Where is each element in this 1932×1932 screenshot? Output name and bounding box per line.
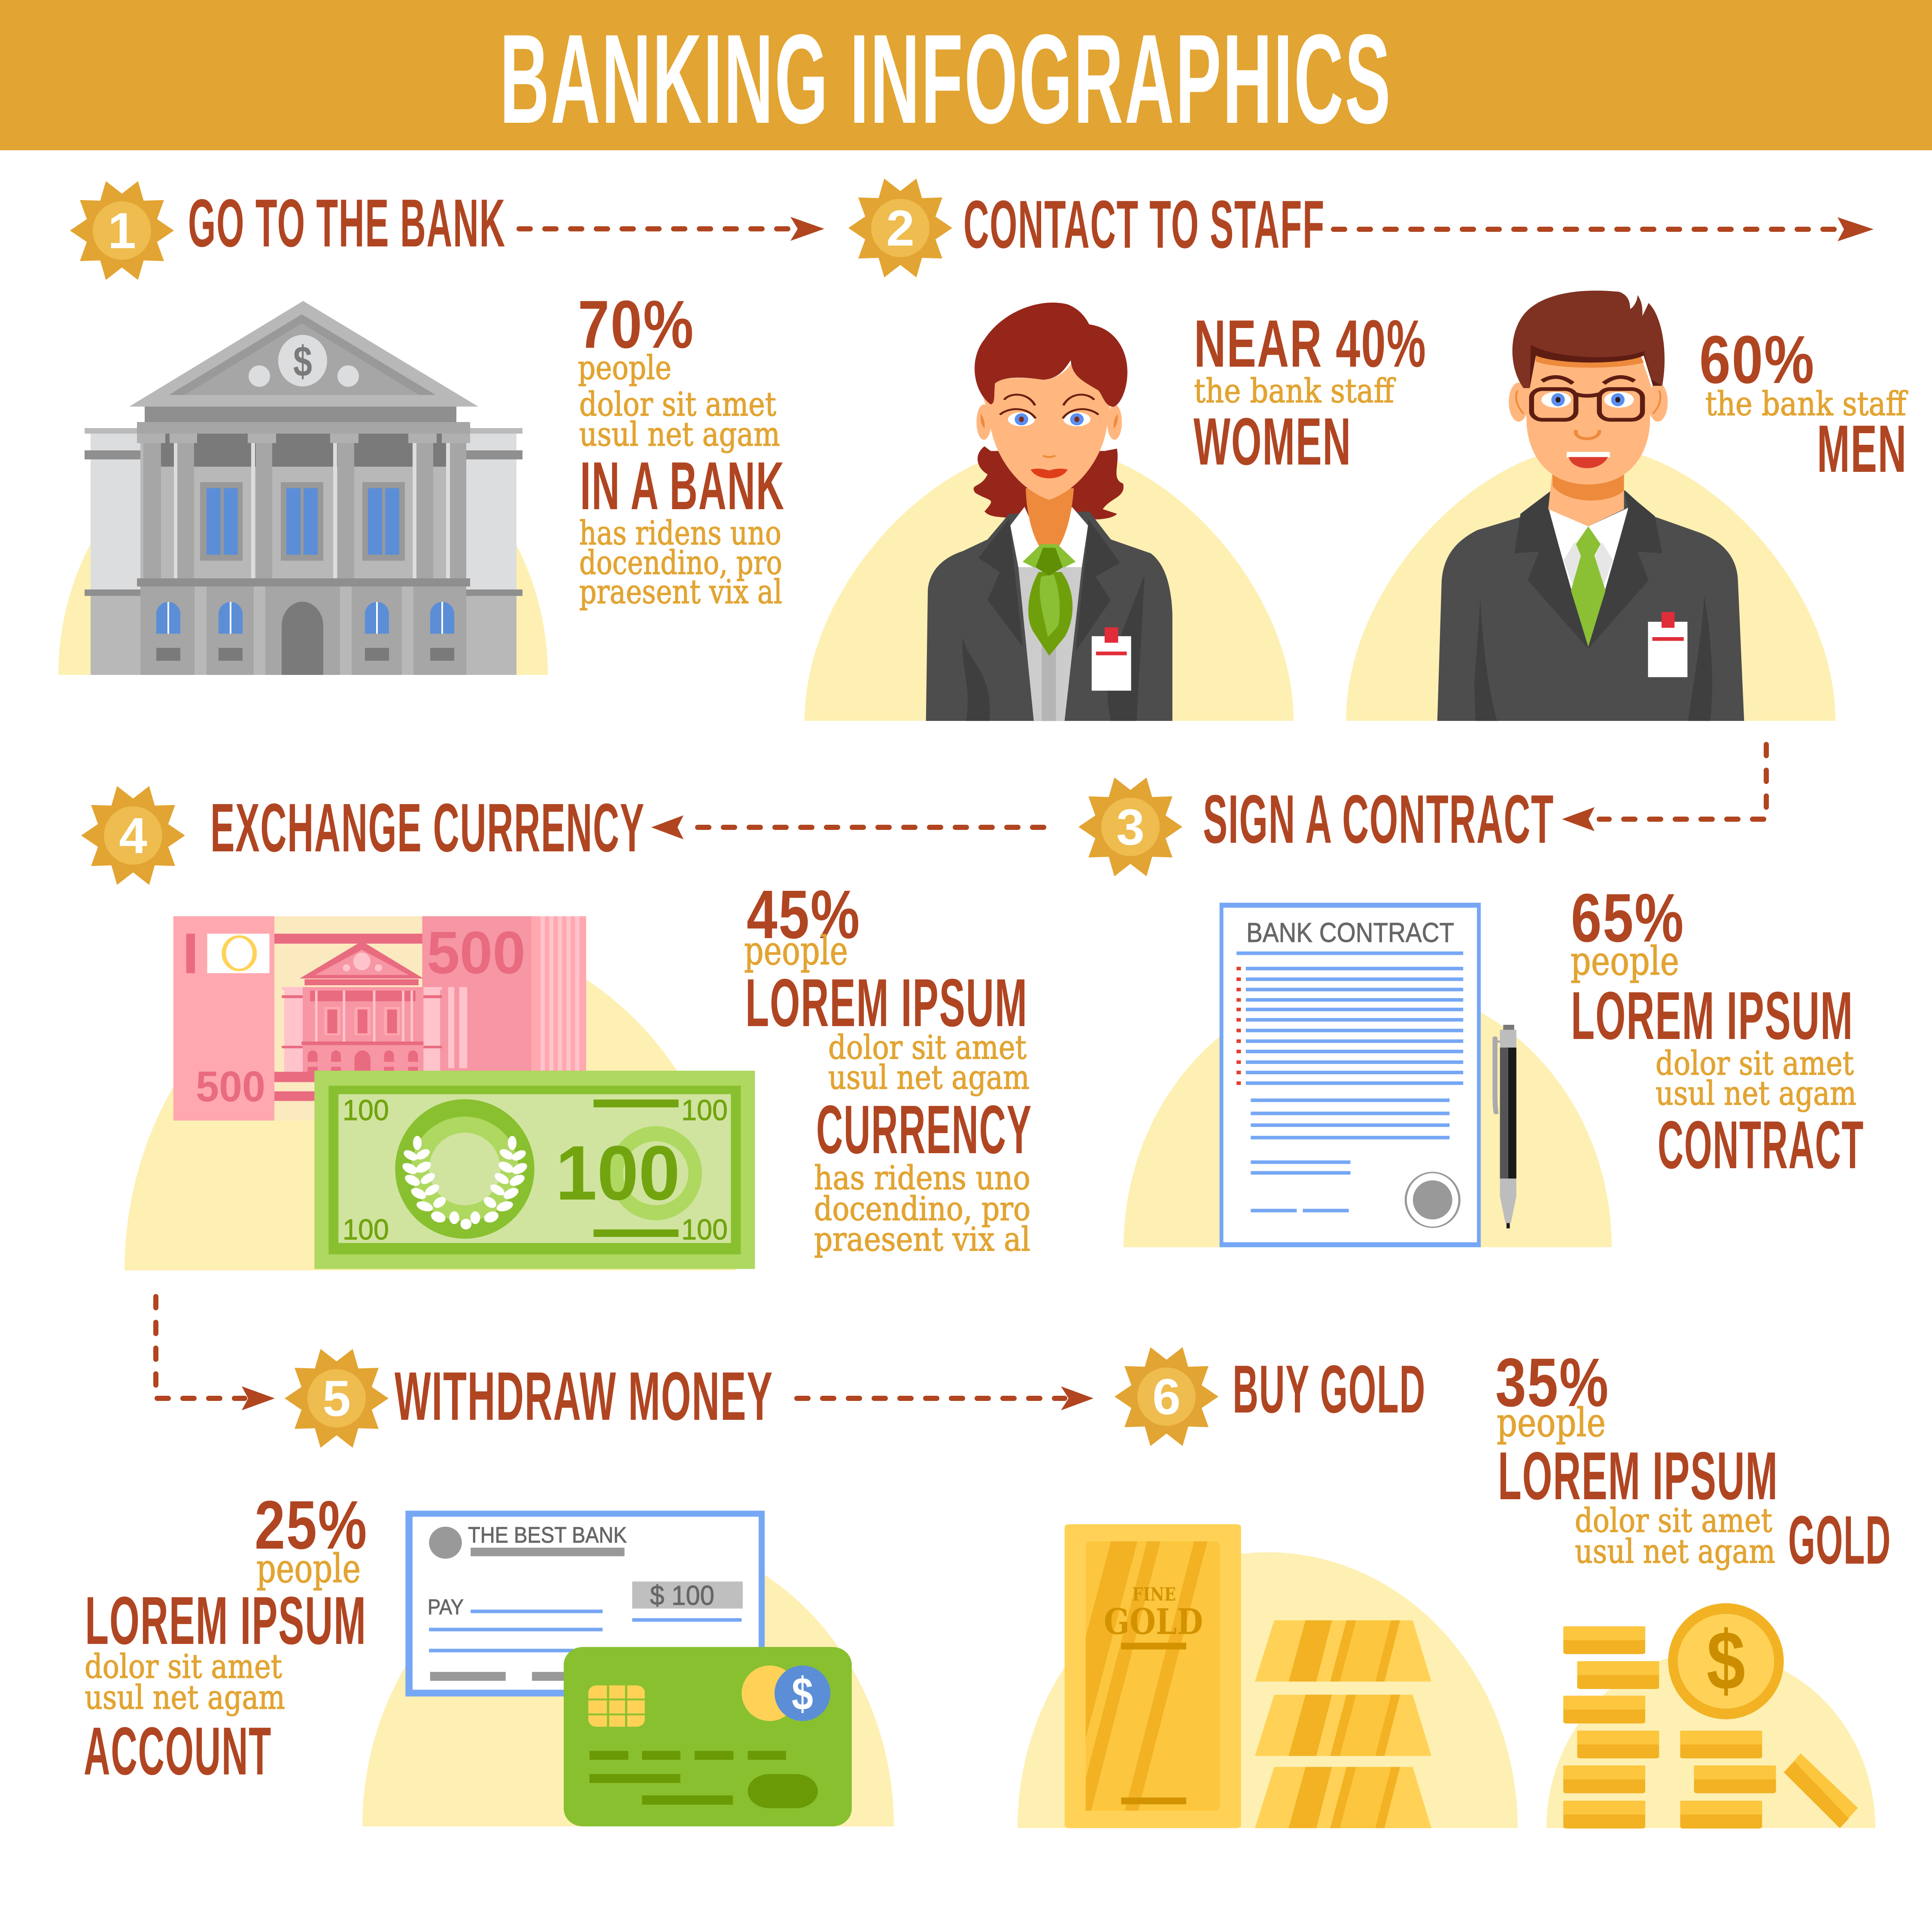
panel: step 1 go to the bank — [58, 181, 824, 675]
illustration: gold ingot — [1065, 1524, 1241, 1828]
text block: near 40% women: the bank staff — [1194, 372, 1396, 410]
illustration: contract and pen — [1220, 903, 1516, 1247]
semicircle backdrop — [362, 1533, 894, 1826]
panel: step 4 exchange currency — [81, 786, 1044, 1270]
heading: buy gold: BUY GOLD — [1233, 1352, 1426, 1427]
text block: 70% people in a bank: dolor sit amet — [579, 386, 776, 424]
badge 1 — [70, 181, 174, 280]
badge 6 — [1115, 1347, 1218, 1446]
illustration: contract and pen: BANK CONTRACT — [1246, 917, 1454, 948]
pink 500 note: 500 — [196, 1063, 265, 1111]
illustration: woman staff — [926, 303, 1173, 721]
text block: 45% people currency: praesent vix al — [814, 1221, 1030, 1259]
text block: 70% people in a bank: 70% — [578, 287, 695, 362]
text block: 70% people in a bank: has ridens uno — [579, 514, 781, 553]
green 100 note: 100 — [556, 1130, 680, 1216]
semicircle backdrop — [125, 932, 736, 1270]
pink 500 note — [173, 916, 586, 1121]
text block: 70% people in a bank: IN A BANK — [580, 448, 785, 524]
heading: contact to staff: CONTACT TO STAFF — [963, 187, 1325, 262]
heading: exchange currency: EXCHANGE CURRENCY — [210, 789, 645, 866]
text block: 45% people currency: dolor sit amet — [828, 1029, 1027, 1067]
text block: 45% people currency: has ridens uno — [814, 1159, 1030, 1197]
illustration: cheque — [405, 1511, 765, 1696]
illustration: coins and coin stacks — [1563, 1603, 1858, 1829]
text block: 45% people currency: CURRENCY — [816, 1091, 1032, 1168]
text block: near 40% women — [1194, 307, 1427, 479]
panel: step 3 sign a contract — [1078, 744, 1864, 1247]
text block: 25% people account: dolor sit amet — [85, 1648, 282, 1686]
text block: 25% people account: LOREM IPSUM — [85, 1583, 367, 1659]
text block: near 40% women: NEAR 40% — [1194, 307, 1427, 381]
text block: 35% people gold: people — [1497, 1400, 1606, 1446]
text block: 45% people currency — [744, 876, 1032, 1259]
text block: 70% people in a bank: praesent vix al — [579, 573, 782, 611]
text block: 70% people in a bank: usul net agam — [579, 416, 780, 454]
panel: step 2 contact to staff — [805, 179, 1908, 721]
text block: 45% people currency: docendino, pro — [814, 1190, 1030, 1228]
arrow: step 3 to step 4 — [651, 815, 1044, 839]
illustration: cheque: PAY — [428, 1595, 464, 1619]
text block: 45% people currency: usul net agam — [828, 1059, 1030, 1097]
text block: 70% people in a bank: docendino, pro — [579, 544, 782, 582]
badge 2 — [848, 179, 952, 277]
green 100 note — [314, 1071, 755, 1269]
green 100 note: 100 — [343, 1094, 389, 1127]
text block: 35% people gold: usul net agam — [1575, 1533, 1775, 1571]
illustration: banknotes — [173, 916, 755, 1269]
badge 5 — [285, 1349, 389, 1448]
text block: 35% people gold: dolor sit amet — [1575, 1502, 1772, 1540]
illustration: cheque: $ 100 — [650, 1580, 714, 1611]
text block: 45% people currency: LOREM IPSUM — [745, 965, 1028, 1041]
text block: 65% people contract: people — [1571, 938, 1679, 984]
text block: 35% people gold: 35% — [1495, 1344, 1610, 1421]
illustration: credit card — [564, 1647, 852, 1826]
text block: 25% people account: 25% — [255, 1486, 368, 1563]
text block: 70% people in a bank: people — [578, 349, 671, 387]
text block: 65% people contract — [1571, 879, 1864, 1183]
badge 4: 4 — [119, 808, 147, 864]
text block: 60% men: 60% — [1699, 322, 1815, 398]
arrow: step 1 to step 2 — [519, 217, 824, 241]
text block: 70% people in a bank — [578, 287, 785, 611]
illustration: stacked gold bars — [1255, 1620, 1431, 1828]
text block: 35% people gold — [1495, 1344, 1891, 1578]
text block: 45% people currency: people — [744, 928, 848, 974]
text block: 25% people account: ACCOUNT — [84, 1713, 272, 1789]
green 100 note: 100 — [681, 1213, 728, 1246]
semicircle backdrop — [58, 410, 548, 675]
text block: 65% people contract: dolor sit amet — [1656, 1045, 1854, 1083]
arrow: step 2 onward — [1334, 217, 1874, 241]
arrow: step 5 to step 6 — [797, 1386, 1094, 1410]
panel: step 5 withdraw money — [84, 1297, 1094, 1826]
illustration: cheque: THE BEST BANK — [468, 1523, 627, 1548]
backdrop: woman — [805, 446, 1294, 721]
text block: near 40% women: WOMEN — [1194, 404, 1352, 479]
text block: 65% people contract: usul net agam — [1656, 1075, 1856, 1113]
badge 2: 2 — [886, 200, 914, 257]
text block: 45% people currency: 45% — [747, 876, 861, 953]
green 100 note: 100 — [343, 1213, 389, 1246]
text block: 25% people account — [84, 1486, 368, 1789]
arrow: step 4 to step 5 — [156, 1297, 275, 1410]
badge 1: 1 — [108, 203, 136, 259]
green 100 note: 100 — [681, 1094, 728, 1127]
text block: 65% people contract: 65% — [1571, 879, 1685, 956]
text block: 60% men — [1699, 322, 1908, 486]
heading: withdraw money: WITHDRAW MONEY — [395, 1358, 773, 1434]
illustration: man staff — [1437, 291, 1744, 721]
heading: go to the bank: GO TO THE BANK — [188, 185, 506, 261]
illustration: gold ingot: FINE — [1132, 1584, 1176, 1605]
semicircle backdrop — [1124, 982, 1612, 1247]
badge 4 — [81, 786, 185, 885]
panel: step 6 buy gold — [1018, 1344, 1891, 1829]
illustration: coins and coin stacks: $ — [1707, 1614, 1745, 1707]
badge 6: 6 — [1152, 1369, 1181, 1425]
illustration: bank building: $ — [293, 337, 312, 386]
semicircle backdrop: coins — [1546, 1652, 1875, 1828]
illustration: bank building — [85, 301, 522, 675]
arrow: step 2 to step 3 — [1562, 744, 1766, 831]
illustration: gold ingot: GOLD — [1104, 1601, 1203, 1643]
text block: 60% men: the bank staff — [1705, 385, 1908, 423]
backdrop: man — [1346, 446, 1835, 721]
badge 3 — [1078, 778, 1182, 876]
text block: 25% people account: usul net agam — [85, 1679, 285, 1717]
badge 5: 5 — [322, 1370, 351, 1427]
pink 500 note: 500 — [427, 919, 526, 986]
heading: sign a contract: SIGN A CONTRACT — [1203, 781, 1554, 857]
text block: 25% people account: people — [256, 1546, 361, 1592]
illustration: credit card: $ — [792, 1668, 813, 1719]
badge 3: 3 — [1116, 799, 1145, 856]
semicircle backdrop: gold bars — [1018, 1552, 1518, 1828]
